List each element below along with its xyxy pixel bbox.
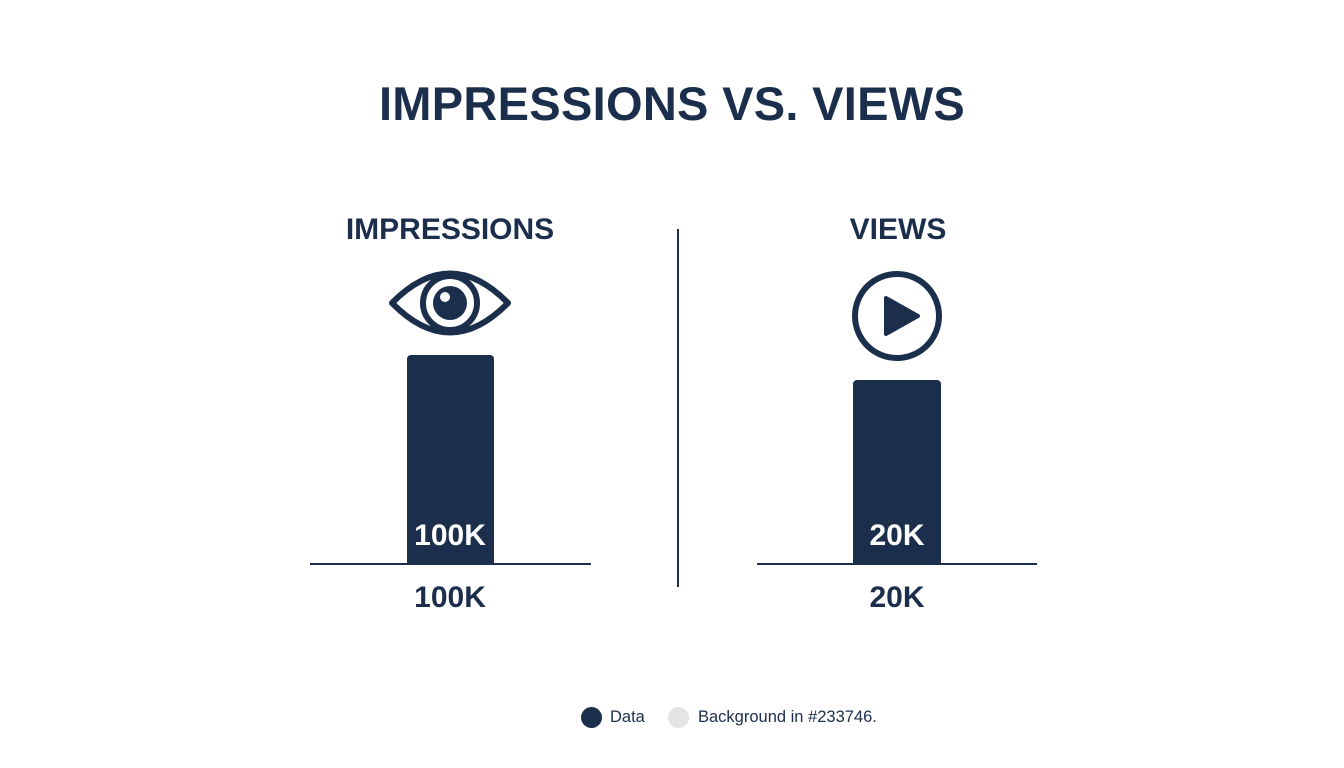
bar label: views: 20K xyxy=(869,519,925,552)
value: impressions: 100K xyxy=(414,581,486,614)
legend: Background in #233746. xyxy=(698,708,877,726)
icon: eye xyxy=(389,270,511,336)
bar: views xyxy=(853,380,941,564)
legend xyxy=(581,707,877,728)
legend: Data xyxy=(610,708,645,726)
value: views: 20K xyxy=(869,581,925,614)
heading: impressions: IMPRESSIONS xyxy=(346,213,554,246)
icon: play xyxy=(852,271,942,361)
bar: impressions xyxy=(407,355,494,564)
heading: views: VIEWS xyxy=(850,213,946,246)
title: IMPRESSIONS VS. VIEWS xyxy=(379,77,965,130)
bar label: impressions: 100K xyxy=(414,519,486,552)
